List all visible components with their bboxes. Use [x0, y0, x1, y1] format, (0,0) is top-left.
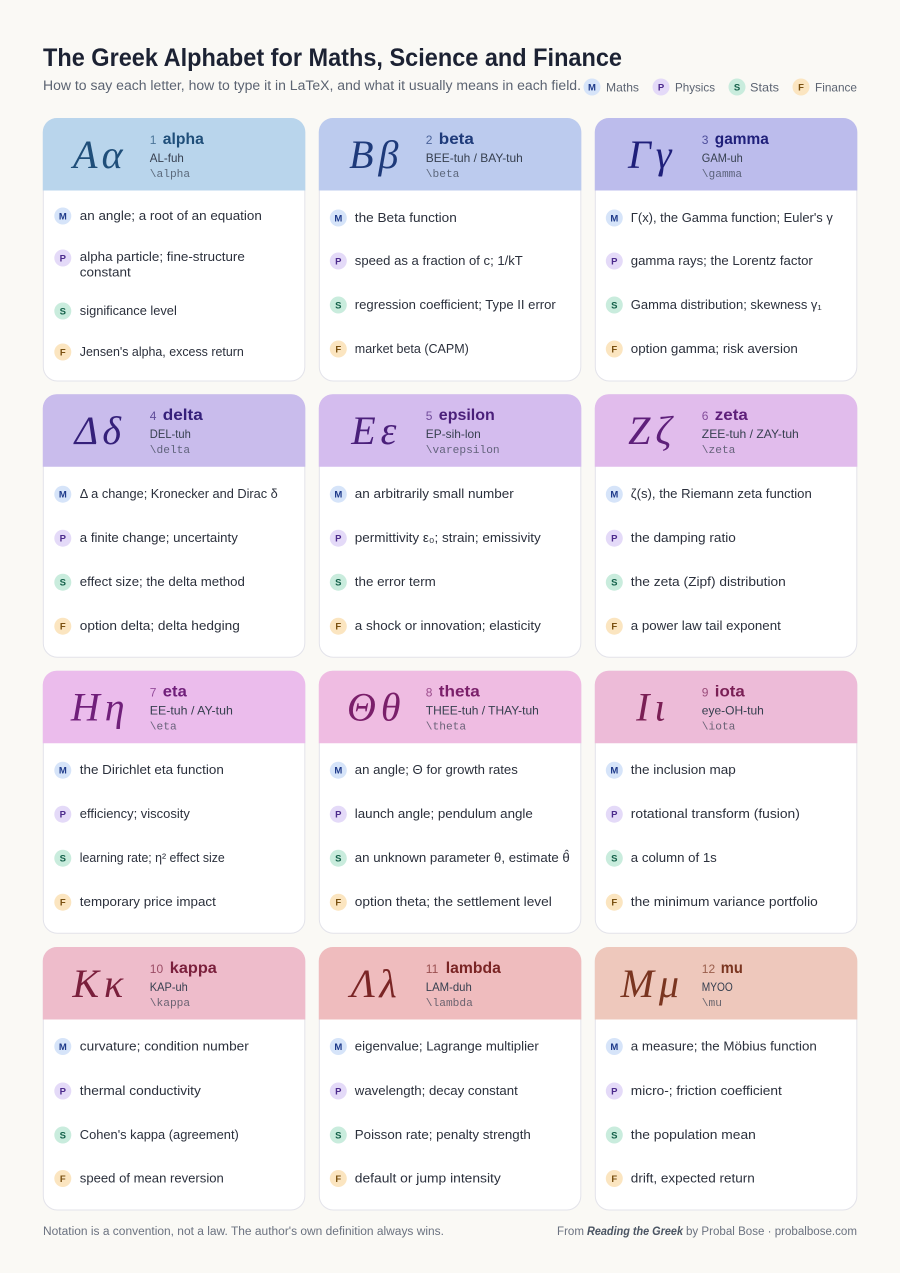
header: mu: MYOO — [702, 980, 733, 994]
header: mu: 12 — [702, 962, 715, 976]
row: stats: the error term — [355, 574, 436, 589]
row: finance: F — [611, 344, 617, 356]
row: stats: the population mean — [631, 1127, 756, 1142]
row: stats — [330, 847, 570, 867]
header: iota: Ι ι — [635, 685, 666, 730]
row: physics: P — [60, 534, 67, 545]
row: finance: F — [335, 1174, 341, 1185]
header: zeta: zeta — [715, 407, 748, 424]
header: theta: 8 — [426, 686, 433, 700]
row: physics: P — [611, 534, 618, 545]
header: beta: 2 — [426, 133, 433, 147]
row: physics: wavelength; decay constant — [354, 1083, 518, 1098]
row: physics: efficiency; viscosity — [80, 806, 190, 821]
header: lambda: lambda — [446, 960, 501, 977]
row: stats: S — [60, 578, 66, 589]
legend: Finance — [815, 80, 857, 94]
row: physics: P — [60, 1086, 67, 1098]
header: epsilon: Ε ε — [350, 408, 397, 453]
row: maths: Δ a change; Kronecker and Dirac δ — [80, 486, 278, 501]
header: mu: Μ μ — [620, 961, 679, 1006]
header: eta — [43, 671, 305, 743]
row: maths: the Beta function — [355, 210, 457, 225]
header: gamma: Γ γ — [627, 132, 673, 177]
row: maths: M — [610, 490, 618, 501]
footer credit: From — [557, 1226, 584, 1238]
header: alpha: AL-fuh — [150, 151, 184, 165]
header: beta: beta — [439, 131, 474, 148]
row: maths: M — [59, 1042, 67, 1053]
header: delta — [43, 394, 305, 467]
panel: epsilon — [319, 394, 581, 657]
header: zeta: ZEE-tuh / ZAY-tuh — [702, 427, 799, 441]
legend: S — [734, 82, 740, 94]
row: stats: S — [611, 300, 617, 312]
row: finance — [330, 1170, 501, 1187]
row: maths: M — [334, 766, 342, 777]
row: stats: learning rate; η² effect size — [80, 850, 225, 865]
panel: iota — [595, 671, 857, 933]
row: stats: S — [60, 306, 66, 318]
subtitle: How to say each letter, how to type it in LaTeX, and what it usually means in each field. — [43, 78, 581, 93]
row: physics: constant — [80, 264, 131, 280]
header: delta: DEL-tuh — [150, 427, 191, 441]
legend: Stats — [750, 80, 779, 94]
header: eta: EE-tuh / AY-tuh — [150, 704, 233, 718]
header: iota: \iota — [702, 722, 736, 734]
row: maths — [330, 210, 457, 226]
legend: F — [798, 82, 804, 94]
header: lambda: Λ λ — [347, 961, 397, 1006]
row: stats: S — [611, 1130, 617, 1142]
row: finance: F — [60, 1174, 66, 1185]
header: epsilon — [319, 394, 581, 467]
row: stats — [54, 302, 177, 320]
header: kappa: \kappa — [150, 998, 190, 1010]
header: alpha — [43, 118, 305, 190]
header: kappa: Κ κ — [71, 961, 124, 1006]
row: physics: P — [335, 810, 342, 821]
row: stats: S — [611, 578, 617, 589]
legend: P — [658, 82, 665, 94]
header: zeta: \zeta — [702, 445, 736, 457]
header: iota: iota — [715, 684, 745, 701]
row: finance: temporary price impact — [80, 894, 216, 909]
row: stats — [330, 574, 436, 591]
row: maths: M — [334, 214, 342, 224]
header: alpha: \alpha — [150, 169, 190, 181]
row: physics: gamma rays; the Lorentz factor — [631, 253, 814, 268]
header: lambda: LAM-duh — [426, 980, 472, 994]
row: stats: S — [335, 578, 341, 589]
header: kappa — [43, 947, 305, 1020]
row: physics — [54, 249, 245, 280]
header: theta: Θ θ — [347, 685, 401, 730]
row: physics: P — [60, 810, 67, 821]
row: stats — [606, 1126, 756, 1144]
panel: delta — [43, 394, 305, 657]
row: finance: F — [60, 898, 66, 909]
legend: Maths — [606, 80, 639, 94]
row: maths: M — [610, 1042, 618, 1053]
row: finance: Jensen's alpha, excess return — [80, 344, 244, 359]
header: kappa: kappa — [170, 960, 217, 977]
row: physics: P — [335, 256, 342, 268]
footer note: Notation is a convention, not a law. The author's own definition always wins. — [43, 1226, 444, 1238]
header: beta: \beta — [426, 169, 460, 181]
row: stats: the zeta (Zipf) distribution — [631, 574, 786, 589]
header: mu: \mu — [702, 998, 722, 1010]
panel: zeta — [595, 394, 857, 657]
row: stats: S — [335, 854, 341, 865]
footer credit: by Probal Bose · probalbose.com — [686, 1226, 857, 1238]
panel: kappa — [43, 947, 305, 1210]
row: physics: rotational transform (fusion) — [631, 806, 800, 821]
panel: theta — [319, 671, 581, 933]
row: physics: P — [60, 254, 67, 264]
header: theta: theta — [439, 684, 480, 701]
row: maths: M — [334, 490, 342, 501]
header: epsilon: epsilon — [439, 407, 495, 424]
row: physics: speed as a fraction of c; 1/kT — [355, 253, 523, 268]
header: beta — [319, 118, 581, 190]
row: maths: an angle; a root of an equation — [80, 208, 262, 223]
row: physics: P — [611, 256, 618, 268]
row: physics — [54, 1082, 201, 1100]
row: finance — [606, 1170, 755, 1187]
header: delta: delta — [163, 407, 203, 424]
row: maths: M — [334, 1042, 342, 1053]
row: physics: P — [611, 810, 618, 821]
row: physics: P — [335, 1086, 342, 1098]
header: lambda — [319, 947, 581, 1020]
row: stats: S — [611, 854, 617, 865]
row: maths: the Dirichlet eta function — [80, 762, 224, 777]
header: mu: mu — [721, 960, 743, 977]
row: finance: F — [335, 622, 341, 633]
header: eta: eta — [163, 684, 187, 701]
row: stats: S — [335, 300, 341, 312]
row: finance: F — [335, 898, 341, 909]
row: finance: F — [60, 622, 66, 633]
header: epsilon: \varepsilon — [426, 445, 500, 457]
legend: M — [588, 82, 596, 94]
row: stats: a column of 1s — [631, 850, 717, 865]
header: beta: BEE-tuh / BAY-tuh — [426, 151, 523, 165]
panel: alpha — [43, 118, 305, 381]
row: finance: F — [611, 622, 617, 633]
header: eta: Η η — [70, 685, 125, 730]
row: maths: a measure; the Möbius function — [631, 1038, 817, 1054]
row: finance: drift, expected return — [631, 1170, 755, 1186]
panel: gamma — [595, 118, 857, 381]
row: finance: option gamma; risk aversion — [631, 341, 798, 356]
row: stats: Poisson rate; penalty strength — [355, 1127, 531, 1142]
header: zeta: 6 — [702, 409, 709, 423]
header: iota — [595, 671, 857, 743]
header: eta: 7 — [150, 686, 157, 700]
header: alpha: alpha — [163, 131, 204, 148]
row: finance: a power law tail exponent — [631, 618, 781, 633]
header: eta: \eta — [150, 722, 177, 734]
row: physics — [606, 530, 736, 547]
row: physics: the damping ratio — [631, 530, 736, 545]
panel: lambda — [319, 947, 581, 1210]
row: finance: the minimum variance portfolio — [631, 894, 818, 909]
row: finance: option theta; the settlement level — [355, 894, 552, 909]
row: physics: thermal conductivity — [80, 1083, 201, 1098]
footer credit: Reading the Greek — [587, 1226, 684, 1238]
row: maths: M — [610, 766, 618, 777]
row: maths: M — [59, 212, 67, 222]
legend — [584, 78, 857, 96]
row: stats: an unknown parameter θ, estimate θ — [355, 850, 570, 865]
row: maths: Γ(x), the Gamma function; Euler's γ — [631, 210, 833, 225]
row: maths: an angle; Θ for growth rates — [355, 762, 518, 777]
header: epsilon: 5 — [426, 409, 433, 423]
row: physics: P — [611, 1086, 618, 1098]
header: lambda: 11 — [426, 962, 439, 976]
row: maths: eigenvalue; Lagrange multiplier — [355, 1038, 540, 1054]
row: finance: option delta; delta hedging — [80, 618, 240, 633]
footer credit — [557, 1226, 857, 1238]
row: stats: ˆ — [565, 847, 570, 862]
row: finance: default or jump intensity — [355, 1170, 501, 1186]
row: maths: curvature; condition number — [80, 1038, 250, 1054]
row: finance: market beta (CAPM) — [355, 341, 469, 356]
header: delta: Δ δ — [73, 408, 122, 453]
row: physics: P — [335, 534, 342, 545]
header: iota: eye-OH-tuh — [702, 704, 764, 718]
row: stats: S — [60, 1130, 66, 1142]
row: physics: micro-; friction coefficient — [631, 1083, 782, 1098]
header: theta: THEE-tuh / THAY-tuh — [426, 704, 539, 718]
header: delta: \delta — [150, 445, 190, 457]
row: stats: Gamma distribution; skewness γ₁ — [631, 297, 822, 312]
row: maths: the inclusion map — [631, 762, 736, 777]
header: epsilon: EP-sih-lon — [426, 427, 481, 441]
header: beta: Β β — [349, 132, 399, 177]
panel: beta — [319, 118, 581, 381]
row: stats: significance level — [80, 303, 177, 318]
row: maths: an arbitrarily small number — [355, 486, 515, 501]
row: finance: speed of mean reversion — [80, 1170, 224, 1186]
header: alpha: Α α — [70, 132, 124, 177]
header: gamma: GAM-uh — [702, 151, 743, 165]
row: maths: M — [59, 490, 67, 501]
row: finance: F — [611, 898, 617, 909]
header: gamma: 3 — [702, 133, 709, 147]
header: mu — [595, 947, 857, 1020]
header: gamma: \gamma — [702, 169, 742, 181]
row: physics: alpha particle; fine-structure — [80, 249, 245, 264]
row: physics: launch angle; pendulum angle — [355, 806, 533, 821]
header: zeta: Ζ ζ — [628, 408, 674, 453]
row: maths: ζ(s), the Riemann zeta function — [631, 486, 812, 501]
row: finance: F — [60, 348, 66, 358]
header: kappa: 10 — [150, 962, 163, 976]
row: stats: S — [60, 854, 66, 865]
header: lambda: \lambda — [426, 998, 473, 1010]
header: gamma: gamma — [715, 131, 769, 148]
header: delta: 4 — [150, 409, 157, 423]
header: zeta — [595, 394, 857, 467]
header: theta — [319, 671, 581, 743]
row: physics: a finite change; uncertainty — [80, 530, 238, 545]
row: maths: M — [59, 766, 67, 777]
row: finance: a shock or innovation; elasticity — [355, 618, 541, 633]
panel: mu — [595, 947, 857, 1210]
row: maths — [606, 762, 736, 779]
row: finance: F — [335, 344, 341, 356]
header: theta: \theta — [426, 722, 466, 734]
row: finance: F — [611, 1174, 617, 1185]
header: alpha: 1 — [150, 133, 157, 147]
header: gamma — [595, 118, 857, 190]
legend: Physics — [675, 80, 715, 94]
panel: eta — [43, 671, 305, 933]
header: kappa: KAP-uh — [150, 980, 188, 994]
title: The Greek Alphabet for Maths, Science and Finance — [43, 44, 622, 72]
row: stats — [606, 850, 717, 867]
row: stats: Cohen's kappa (agreement) — [80, 1127, 239, 1142]
row: maths: M — [610, 214, 618, 224]
row: stats: S — [335, 1130, 341, 1142]
header: iota: 9 — [702, 686, 709, 700]
row: stats: effect size; the delta method — [80, 574, 245, 589]
row: stats: regression coefficient; Type II error — [355, 297, 557, 312]
row: physics: permittivity ε₀; strain; emissivity — [355, 530, 541, 545]
